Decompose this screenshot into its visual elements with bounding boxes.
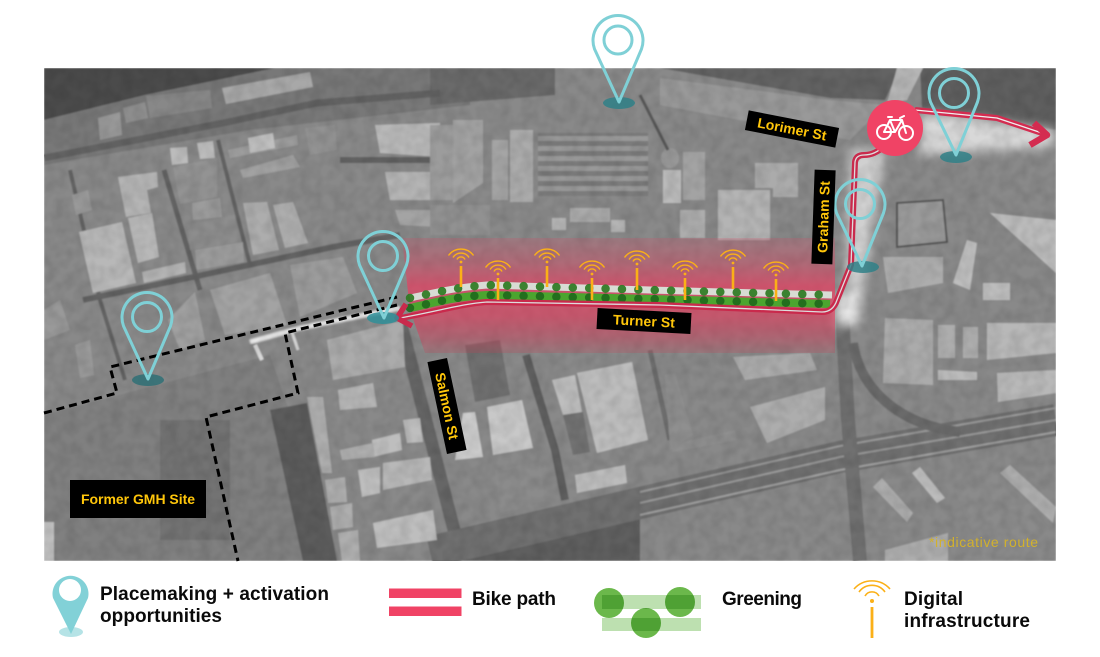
greening strip bbox=[410, 285, 832, 308]
arrowhead west bbox=[397, 304, 412, 326]
legend: placemaking: Placemaking + activation bbox=[100, 584, 329, 605]
bright highlights bbox=[835, 112, 1053, 325]
legend: greening: Greening bbox=[722, 589, 802, 610]
buildings west bbox=[44, 72, 440, 380]
digital infrastructure masts bbox=[448, 249, 788, 301]
label: Salmon St bbox=[427, 358, 467, 454]
aerial map bbox=[44, 68, 1056, 561]
label: Turner St bbox=[597, 308, 691, 334]
arrowhead east bbox=[1030, 123, 1047, 145]
bottom dark tile bbox=[464, 519, 640, 561]
boundary dashed line bbox=[44, 297, 397, 561]
label: Former GMH Site bbox=[70, 480, 206, 518]
legend: greening bbox=[594, 587, 802, 638]
corridor red overlay bbox=[402, 238, 835, 353]
bike path bbox=[397, 110, 1047, 326]
buildings mid south bbox=[552, 375, 582, 415]
label: Graham St: Graham St bbox=[814, 180, 833, 253]
top-left water bbox=[44, 68, 275, 120]
label: Graham St bbox=[811, 170, 836, 264]
legend: placemaking: opportunities bbox=[100, 606, 222, 627]
legend: digital infrastructure: infrastructure bbox=[904, 611, 1030, 632]
site area bbox=[44, 355, 340, 561]
location pins bbox=[122, 15, 979, 386]
legend: digital infrastructure bbox=[854, 581, 1030, 638]
label: Turner St: Turner St bbox=[613, 311, 676, 331]
roads bbox=[44, 93, 670, 561]
label: Lorimer St bbox=[745, 110, 839, 148]
note: indicative route: *indicative route bbox=[929, 534, 1038, 550]
label: Former GMH Site: Former GMH Site bbox=[81, 491, 195, 507]
label: Salmon St: Salmon St bbox=[432, 371, 462, 441]
legend: bike path: Bike path bbox=[472, 589, 556, 610]
label: Lorimer St: Lorimer St bbox=[756, 114, 828, 144]
buildings east bbox=[873, 198, 1056, 561]
buildings south-west blocks bbox=[307, 383, 437, 561]
legend: placemaking bbox=[53, 576, 329, 637]
highway bbox=[430, 420, 1056, 552]
legend: digital infrastructure: Digital bbox=[904, 589, 963, 610]
legend: bike path bbox=[389, 588, 556, 616]
buildings centre north bbox=[430, 95, 825, 512]
top-centre field and water bbox=[430, 68, 555, 105]
icon: bicycle badge bbox=[867, 100, 923, 156]
